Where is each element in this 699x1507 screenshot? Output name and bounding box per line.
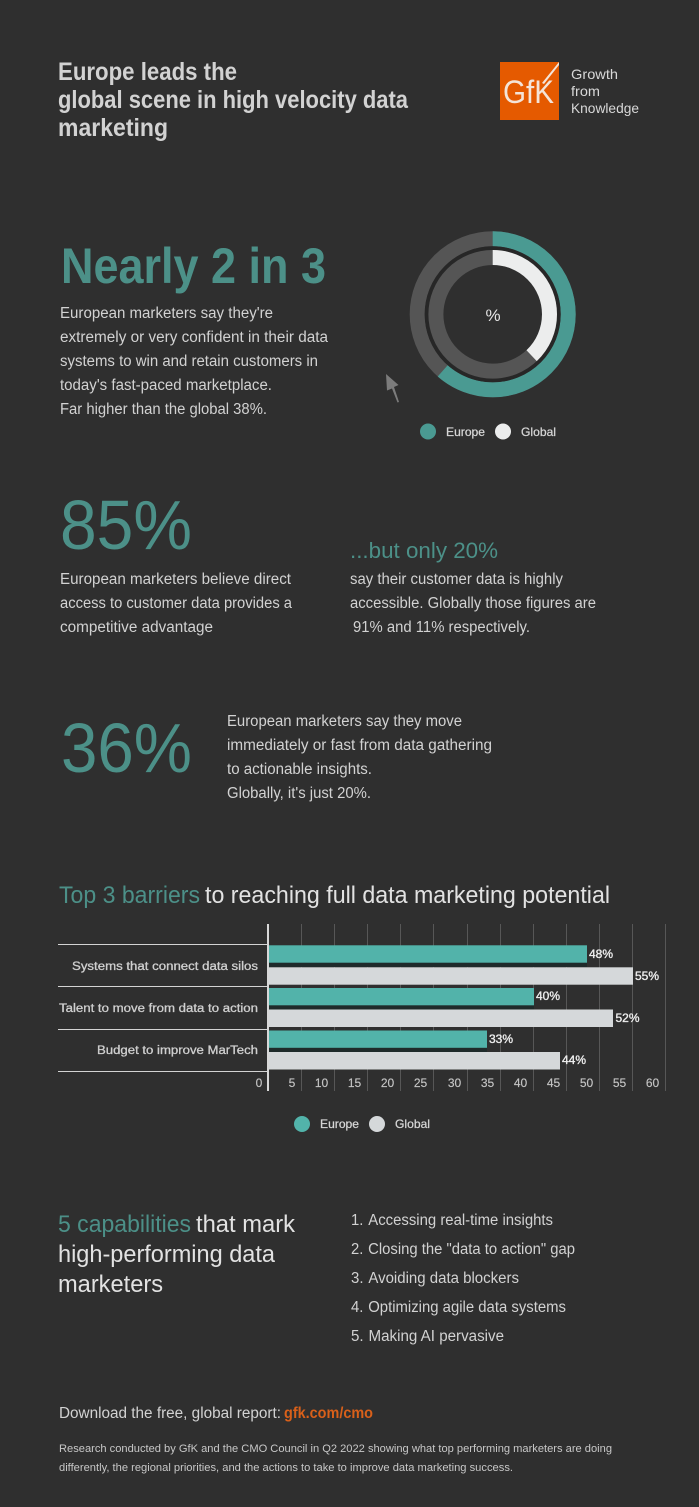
legend: bar chart: Europe xyxy=(320,1117,359,1131)
title: global scene in high velocity data xyxy=(58,86,409,114)
stat: but only 20%: ...but only 20% xyxy=(350,538,498,563)
bars: budget to improve MarTech xyxy=(269,1030,560,1070)
text block: confidence: systems to win and retain customers in xyxy=(60,353,318,370)
footnote: differently, the regional priorities, and the actions to take to improve data marketing success. xyxy=(59,1462,513,1474)
stat: 85%: 85% xyxy=(60,486,192,564)
list: 5 capabilities: 3. Avoiding data blockers xyxy=(351,1270,519,1287)
category labels: Budget to improve MarTech xyxy=(97,1045,258,1057)
heading: nearly 2 in 3: Nearly 2 in 3 xyxy=(61,238,326,294)
heading: top 3 barriers: Top 3 barriers xyxy=(59,882,200,909)
legend: donut xyxy=(420,424,556,440)
x axis labels: 35 xyxy=(481,1076,494,1090)
value labels: 40% xyxy=(536,991,560,1003)
panel: 85% xyxy=(60,486,292,636)
value labels: 33% xyxy=(489,1034,513,1046)
x axis labels: 10 xyxy=(315,1076,328,1090)
text block: accessibility: accessible. Globally those figures are xyxy=(350,595,596,612)
x axis labels: 45 xyxy=(547,1076,560,1090)
text block: direct access: access to customer data provides a xyxy=(60,595,292,612)
category labels: Talent to move from data to action xyxy=(59,1003,258,1015)
text block: confidence: extremely or very confident in their data xyxy=(60,329,328,346)
text block: speed to insight: European marketers say they move xyxy=(227,713,462,730)
value labels xyxy=(489,949,659,1067)
legend: bar chart: Global xyxy=(395,1117,430,1131)
text block: accessibility: 91% and 11% respectively. xyxy=(353,619,530,636)
heading: 5 capabilities: marketers xyxy=(58,1271,163,1298)
panel: but only 20% xyxy=(350,538,596,636)
logo: GfK Growth from Knowledge: Growth xyxy=(571,66,618,82)
x axis labels: 25 xyxy=(414,1076,427,1090)
panel: 36% xyxy=(61,709,492,802)
donut chart: Europe vs Global: % xyxy=(485,306,501,325)
x axis labels: 30 xyxy=(448,1076,461,1090)
list: 5 capabilities xyxy=(351,1212,575,1345)
text block: direct access: European marketers believe direct xyxy=(60,571,292,588)
text block: speed to insight xyxy=(227,713,492,802)
x axis labels: 55 xyxy=(613,1076,626,1090)
list: 5 capabilities: 1. Accessing real-time insights xyxy=(351,1212,553,1229)
bar chart: barriers xyxy=(58,924,666,1091)
call to action: download: Download the free, global report: xyxy=(59,1405,281,1422)
text block: speed to insight: to actionable insights. xyxy=(227,761,372,778)
x axis labels: 15 xyxy=(348,1076,361,1090)
category labels: Systems that connect data silos xyxy=(72,961,258,973)
legend: donut: Europe xyxy=(446,425,485,439)
x axis labels: 50 xyxy=(580,1076,593,1090)
list: 5 capabilities: 5. Making AI pervasive xyxy=(351,1328,504,1345)
x axis labels: 40 xyxy=(514,1076,527,1090)
text block: speed to insight: immediately or fast from data gathering xyxy=(227,737,492,754)
footnote: Research conducted by GfK and the CMO Council in Q2 2022 showing what top performing marketers are doing xyxy=(59,1443,612,1455)
logo: GfK Growth from Knowledge xyxy=(500,62,639,120)
icon: cursor arrow xyxy=(386,374,399,402)
heading: 5 capabilities: high-performing data xyxy=(58,1241,276,1268)
text block: confidence: European marketers say they're xyxy=(60,305,273,322)
x axis labels: 60 xyxy=(646,1076,659,1090)
logo: GfK Growth from Knowledge: from xyxy=(571,83,600,99)
panel: nearly 2 in 3 xyxy=(60,238,328,418)
bars: talent to move from data to action xyxy=(269,988,613,1027)
value labels: 52% xyxy=(616,1013,640,1025)
category labels xyxy=(59,961,258,1057)
bars: systems that connect data silos xyxy=(269,945,633,985)
donut chart: Europe vs Global xyxy=(417,239,568,390)
heading: 5 capabilities: 5 capabilities xyxy=(58,1211,191,1238)
legend: donut: Global xyxy=(521,425,556,439)
text block: confidence xyxy=(60,305,328,418)
title xyxy=(58,58,409,142)
text block: confidence: today's fast-paced marketplace. xyxy=(60,377,272,394)
title: Europe leads the xyxy=(58,58,237,86)
value labels: 55% xyxy=(635,971,659,983)
text block: accessibility xyxy=(350,571,596,636)
list: 5 capabilities: 4. Optimizing agile data systems xyxy=(351,1299,566,1316)
x axis labels: 20 xyxy=(381,1076,394,1090)
value labels: 48% xyxy=(589,949,613,961)
heading: 5 capabilities xyxy=(58,1211,296,1298)
call to action: download: gfk.com/cmo xyxy=(284,1405,373,1422)
text block: accessibility: say their customer data is highly xyxy=(350,571,563,588)
title: marketing xyxy=(58,114,168,142)
text block: confidence: Far higher than the global 38%. xyxy=(60,401,267,418)
list: 5 capabilities: 2. Closing the "data to action" gap xyxy=(351,1241,575,1258)
x axis labels: 0 xyxy=(256,1076,263,1090)
text block: speed to insight: Globally, it's just 20%. xyxy=(227,785,371,802)
heading: 5 capabilities: that mark xyxy=(196,1211,296,1238)
logo: GfK Growth from Knowledge: Knowledge xyxy=(571,100,639,116)
text block: direct access xyxy=(60,571,292,636)
heading: top 3 barriers: to reaching full data marketing potential xyxy=(205,882,610,909)
x axis labels: 5 xyxy=(289,1076,296,1090)
footnote xyxy=(59,1443,612,1474)
stat: 36%: 36% xyxy=(61,709,192,787)
x axis labels xyxy=(256,1076,659,1090)
logo: GfK Growth from Knowledge: GfK xyxy=(503,74,554,110)
text block: direct access: competitive advantage xyxy=(60,619,213,636)
legend: bar chart xyxy=(294,1116,430,1132)
value labels: 44% xyxy=(562,1055,586,1067)
